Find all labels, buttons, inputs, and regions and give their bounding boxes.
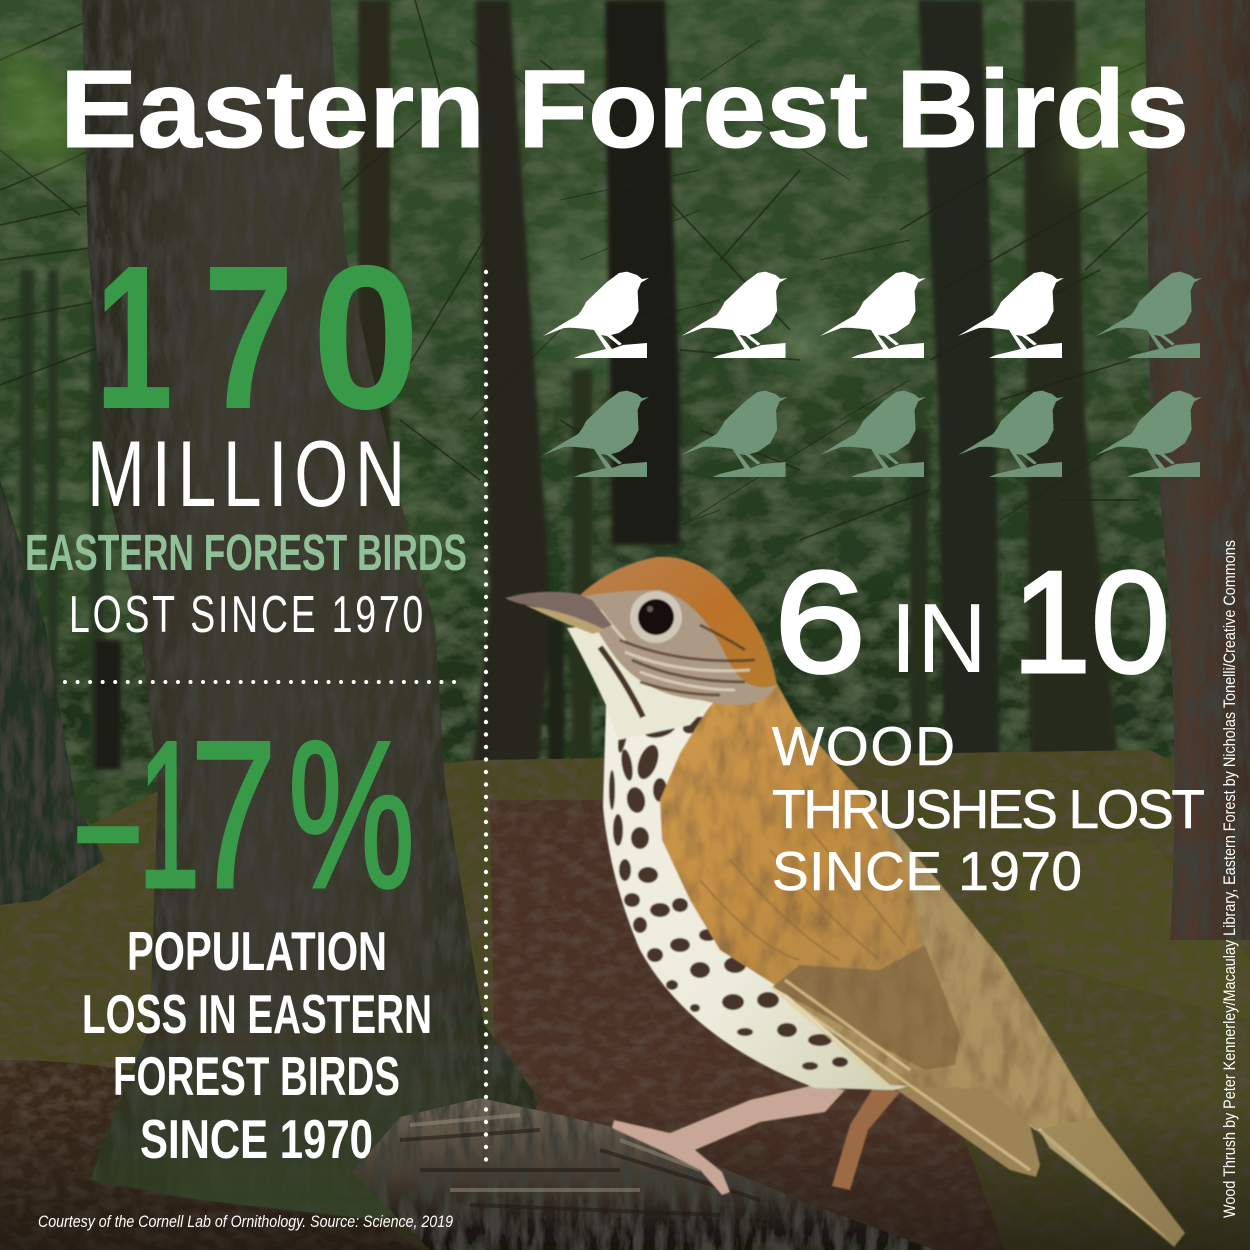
population loss text: LOSS IN EASTERN [82,983,432,1045]
wood thrushes lost text: WOOD [772,715,955,777]
big number -17%: 7 [190,697,277,932]
icon: white birds [543,272,1064,358]
forest floor [0,750,1250,1250]
throat [567,625,712,740]
back and rump [690,670,1097,1130]
icon grid: bird silhouettes, 4 of 10 highlighted [543,272,1202,477]
panel: 170 million stat [25,223,467,643]
big ratio 6 in 10 [774,541,1170,703]
wing primaries [772,945,960,1070]
panel: 6 in 10 stat [772,541,1205,902]
big number 170: 0 [312,223,420,452]
tree trunk left [82,0,540,1220]
beak [505,592,612,632]
tree trunk far left [0,480,105,905]
million label: MILLION [87,421,405,526]
log perch [352,1098,935,1250]
big number 170: 7 [203,223,294,452]
eye [630,591,682,643]
chest and belly [567,628,960,1090]
wing feather lines [700,830,905,960]
near leg [612,1085,845,1195]
population loss text: POPULATION [127,920,387,982]
tail [985,1030,1185,1247]
big number -17%: 1 [138,697,200,932]
wood thrush photo [505,557,1185,1247]
far leg [832,1085,900,1190]
title: Eastern [60,48,485,171]
title: Birds [896,48,1189,171]
breast spots [609,713,848,1070]
crown [578,557,777,687]
wood thrushes lost text: THRUSHES LOST [772,778,1205,840]
wood thrushes lost text [772,715,1205,902]
icon: muted birds [543,272,1202,477]
big number -17% [78,697,415,933]
panel: minus 17 percent stat [78,697,432,1170]
eastern forest birds label: EASTERN FOREST BIRDS [25,524,467,581]
credit: photo: Wood Thrush by Peter Kennerley/Macaulay Library, Eastern Forest by Nicholas Tonelli/Creative Commons [1220,540,1239,1218]
title: Forest [518,48,868,171]
wing edge stripes [772,980,1030,1170]
lost since 1970 label: LOST SINCE 1970 [69,585,423,643]
population loss text: SINCE 1970 [140,1108,373,1170]
branches [0,0,1150,540]
big number -17%: % [288,697,415,932]
title [60,48,1189,171]
big ratio 6 in 10: 6 [774,541,866,703]
leaves upper left [0,40,80,180]
big number -17%: – [78,698,138,933]
golden wing coverts [660,670,925,985]
cheek streaks [620,625,755,695]
big ratio 6 in 10: 10 [1012,541,1170,703]
malar stripe [600,647,643,717]
white rump feather [992,1088,1042,1130]
big number 170: 1 [95,223,173,452]
wood thrushes lost text: SINCE 1970 [772,840,1082,902]
tree trunk right [1145,0,1250,940]
population loss text [82,920,432,1170]
population loss text: FOREST BIRDS [113,1045,400,1107]
big ratio 6 in 10: IN [890,583,987,693]
horizontal dotted line [65,680,456,684]
head [578,557,777,705]
big number 170 [95,223,420,452]
under-tail coverts [890,1085,1040,1177]
credit: source: Courtesy of the Cornell Lab of Ornithology. Source: Science, 2019 [38,1213,453,1231]
vertical dotted line [484,272,488,1162]
